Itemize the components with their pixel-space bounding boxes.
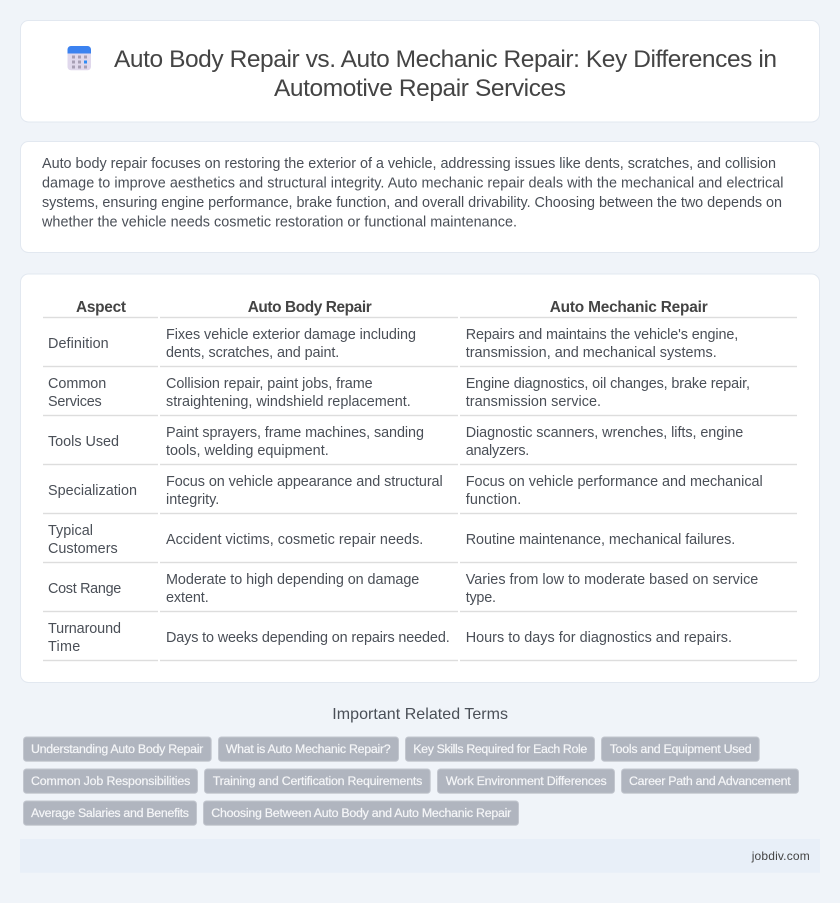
panel: comparison table (20, 274, 820, 682)
table row: turnaround time: Hours to days for diagnostics and repairs. (466, 630, 732, 646)
table row: specialization: Focus on vehicle appearance and structural (166, 474, 443, 490)
table header row (43, 299, 797, 318)
tag: common job responsibilities (24, 769, 198, 793)
tag: what is auto mechanic repair (218, 737, 398, 761)
table row: common services: transmission service. (466, 394, 601, 410)
tag: career path (622, 769, 798, 793)
table row: common services: straightening, windshield replacement. (166, 394, 411, 410)
table row: definition (43, 327, 797, 367)
table row: common services: Collision repair, paint jobs, frame (166, 376, 373, 392)
table row: turnaround time: Time (48, 639, 80, 655)
table row: definition: Fixes vehicle exterior damage including (166, 327, 416, 343)
tag: work environment: Work Environment Differences (446, 774, 607, 788)
table row: tools used: tools, welding equipment. (166, 443, 329, 459)
table row: cost range: Cost Range (48, 581, 121, 597)
tag: average salaries (24, 801, 196, 825)
table row: specialization (43, 474, 797, 514)
table row: definition: Definition (48, 336, 109, 352)
text block: introduction paragraph: Auto body repair focuses on restoring the exterior of a vehicle, addressing issues like dents, scratches, and collision (42, 156, 776, 172)
tag: career path: Career Path and Advancement (629, 774, 791, 788)
panel: introduction (20, 142, 820, 252)
tag: average salaries: Average Salaries and Benefits (31, 806, 189, 820)
heading: important related terms: Important Related Terms (332, 706, 508, 723)
header panel (20, 20, 820, 122)
tag: key skills: Key Skills Required for Each Role (413, 742, 587, 756)
footer (20, 839, 820, 873)
text block: introduction paragraph: damage to improve aesthetics and structural integrity. Auto mechanic repair deals with the mechanical and electrical (42, 176, 784, 192)
tag: understanding auto body repair (24, 737, 211, 761)
tag: key skills (406, 737, 594, 761)
table row: tools used: Diagnostic scanners, wrenches, lifts, engine (466, 425, 743, 441)
table row: specialization: Focus on vehicle performance and mechanical (466, 474, 763, 490)
table row: typical customers: Accident victims, cosmetic repair needs. (166, 532, 423, 548)
tag: tools and equipment (602, 737, 759, 761)
related terms tags (24, 737, 798, 825)
table row: turnaround time: Days to weeks depending on repairs needed. (166, 630, 450, 646)
table row: specialization: integrity. (166, 492, 219, 508)
table row: typical customers: Customers (48, 541, 118, 557)
title: Automotive Repair Services (274, 75, 566, 102)
table row: tools used: Tools Used (48, 434, 119, 450)
table row: definition: Repairs and maintains the vehicle's engine, (466, 327, 738, 343)
text block: introduction paragraph: systems, ensuring engine performance, brake function, and overall drivability. Choosing between the two depends on (42, 195, 782, 211)
title (114, 46, 777, 102)
tag: common job responsibilities: Common Job Responsibilities (31, 774, 190, 788)
table row: common services: Services (48, 394, 102, 410)
table header row: Aspect (76, 299, 126, 316)
table row: tools used (43, 425, 797, 465)
tag: tools and equipment: Tools and Equipment Used (610, 742, 752, 756)
table row: common services (43, 376, 797, 416)
table row: specialization: function. (466, 492, 521, 508)
footer: jobdiv.com (751, 849, 810, 863)
title: Auto Body Repair vs. Auto Mechanic Repair: Key Differences in (114, 46, 777, 73)
text block: introduction paragraph (41, 156, 784, 230)
tag: training and certification (204, 769, 430, 793)
table row: cost range: Moderate to high depending on damage (166, 572, 419, 588)
table row: definition: transmission, and mechanical systems. (466, 345, 717, 361)
tag: choosing between: Choosing Between Auto Body and Auto Mechanic Repair (211, 806, 511, 820)
table row: typical customers: Routine maintenance, mechanical failures. (466, 532, 735, 548)
tag: training and certification: Training and Certification Requirements (213, 774, 422, 788)
table row: tools used: Paint sprayers, frame machines, sanding (166, 425, 424, 441)
table row: definition: dents, scratches, and paint. (166, 345, 339, 361)
table row: typical customers (43, 523, 797, 563)
table header row: Auto Mechanic Repair (550, 299, 708, 316)
table row: cost range: Varies from low to moderate based on service (466, 572, 758, 588)
table row: common services: Engine diagnostics, oil changes, brake repair, (466, 376, 750, 392)
table row: typical customers: Typical (48, 523, 93, 539)
table row: turnaround time (43, 621, 797, 661)
table row: common services: Common (48, 376, 106, 392)
table row: cost range (43, 572, 797, 612)
table header row: Auto Body Repair (248, 299, 372, 316)
table row: specialization: Specialization (48, 483, 137, 499)
tag: work environment (438, 769, 614, 793)
table row: cost range: extent. (166, 590, 209, 606)
tag: understanding auto body repair: Understanding Auto Body Repair (31, 742, 203, 756)
table row: turnaround time: Turnaround (48, 621, 121, 637)
tag: what is auto mechanic repair: What is Auto Mechanic Repair? (226, 742, 391, 756)
tag: choosing between (204, 801, 518, 825)
table row: cost range: type. (466, 590, 496, 606)
icon: calendar (68, 46, 91, 70)
text block: introduction paragraph: whether the vehicle needs cosmetic restoration or functional maintenance. (41, 214, 517, 230)
table row: tools used: analyzers. (466, 443, 529, 459)
